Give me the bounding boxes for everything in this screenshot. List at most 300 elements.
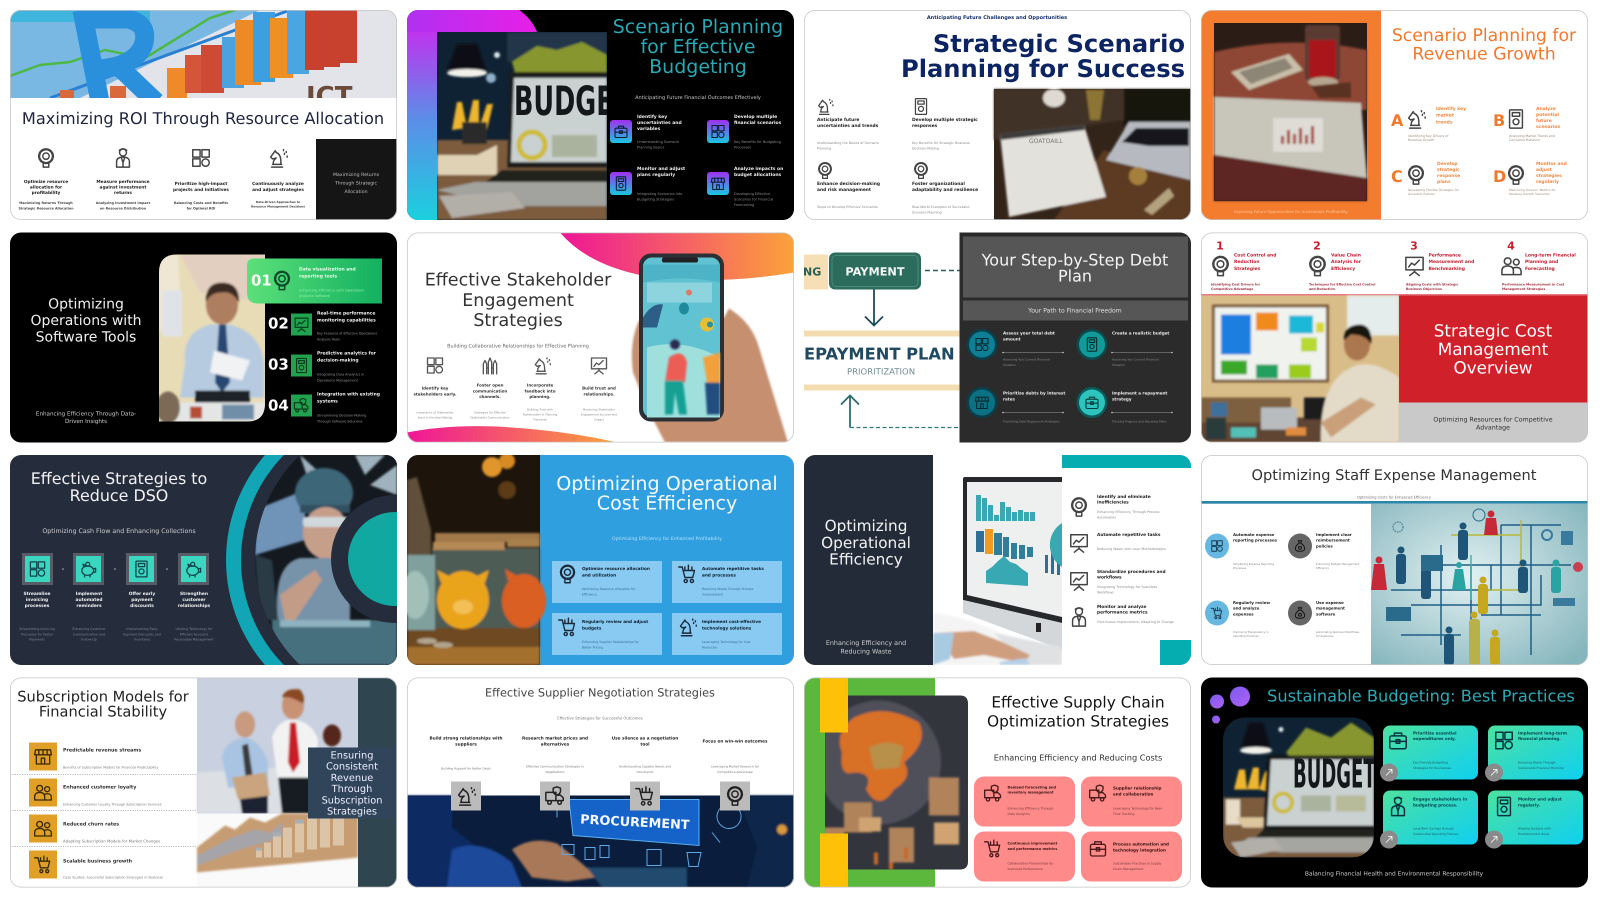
sidebar and overlay box: Ensuring — [331, 750, 373, 762]
item: automate expense reporting — [1205, 532, 1278, 570]
title: Strategic Scenario — [933, 30, 1185, 58]
item: analyze impacts — [707, 166, 783, 207]
item: early payment discounts: Implementing Early — [126, 627, 158, 631]
orange sidebar — [1201, 10, 1381, 220]
item: review expenses: expenses — [1233, 611, 1254, 616]
item: prioritize debts: Prioritizing Debt Repayment Strategies — [1003, 420, 1060, 424]
item: process automation: Chain Management — [1113, 867, 1144, 871]
title: for Effective — [640, 36, 756, 58]
item: reimbursement policies — [1288, 532, 1359, 570]
item: review expenses: Regularly review — [1233, 600, 1270, 605]
item: develop multiple scenarios: Processes — [734, 145, 751, 149]
sidebar: Maximizing Returns — [316, 139, 397, 220]
item: analyze impacts: Forecasting — [734, 203, 754, 207]
photo: ROI 3D bar chart: JCT — [304, 82, 353, 112]
item: build relationships: suppliers — [455, 742, 477, 746]
item: review expenses — [1205, 600, 1270, 638]
item: standardize procedures — [1071, 569, 1166, 594]
item: demand forecasting — [974, 776, 1075, 826]
item: anticipate future: uncertainties and trends — [817, 123, 879, 129]
item: develop strategic responses: Develop multiple strategic — [912, 117, 978, 123]
item: identify stakeholders: stakeholders early. — [413, 391, 457, 396]
item: churn rates — [29, 814, 160, 844]
item: assess total debt — [966, 329, 1064, 367]
item: prioritize debts: Prioritize debts by interest — [1003, 390, 1065, 396]
item: identify key uncertainties — [610, 114, 682, 149]
item: anticipate future — [817, 99, 879, 150]
item: monitor and adjust plans: Monitor and adjust — [637, 166, 686, 172]
item 02: real-time monitoring: Analysis Tools — [317, 338, 340, 342]
item: early payment discounts: Incentives — [134, 638, 151, 642]
item: foster communication: Foster open — [477, 382, 504, 388]
item D: monitor and adjust: Monitor and — [1536, 161, 1567, 167]
item: incorporate feedback: Building Trust with — [527, 408, 553, 412]
item: automate expense reporting: Automate expense — [1233, 532, 1275, 537]
item: streamline invoicing: Payments — [29, 638, 45, 642]
item C: develop response plans: Uncertain Futures — [1408, 192, 1435, 196]
item: engage stakeholders — [1380, 790, 1478, 848]
gradient accent — [407, 10, 537, 220]
item: customer relationships — [174, 553, 214, 642]
teal top accent — [1062, 455, 1191, 468]
item: supplier relationship: Time Tracking — [1112, 812, 1134, 816]
item 4: long-term planning: Planning and — [1525, 259, 1558, 265]
sidebar and overlay box: Strategies — [327, 806, 377, 818]
title: Engagement — [462, 291, 574, 311]
item 3: performance measurement: Performance — [1428, 252, 1461, 258]
photo: two businessmen — [197, 678, 358, 814]
item: prioritize high-impact projects: Prioritize high-impact — [175, 181, 227, 187]
item: assess total debt: Assessing Your Current Financial — [1003, 358, 1050, 362]
sidebar: Maximizing Returns: Allocation — [344, 189, 368, 195]
sidebar: Maximizing Returns: Through Strategic — [334, 181, 377, 187]
item: early payment discounts: discounts — [130, 603, 154, 609]
item: continuously analyze: Resource Management Decisions — [251, 204, 305, 208]
panel: Optimizing Operational Cost Efficiency slide — [401, 453, 794, 665]
item 04: integration: systems — [317, 398, 338, 404]
item 02: real-time monitoring: 02 — [268, 314, 289, 332]
photo: budget laptop — [437, 32, 607, 220]
subtitle: Anticipating Future Financial Outcomes Effectively — [635, 95, 761, 101]
item: foster adaptability: Real-World Examples of Successful — [912, 205, 969, 209]
grey subtitle panel: Advantage — [1476, 424, 1510, 432]
item B: analyze potential scenarios: future — [1536, 118, 1552, 124]
item: foster adaptability: Foster organizational — [912, 181, 965, 187]
sidebar and overlay box: Revenue — [331, 773, 373, 784]
item 01: data visualization — [247, 258, 382, 304]
item: analyze impacts: Scenarios for Financial — [734, 197, 773, 201]
item: resource allocation: Optimizing Resource Allocation for — [582, 587, 636, 591]
item: continuous improvement — [974, 832, 1075, 882]
item D: monitor and adjust — [1493, 161, 1567, 196]
item: supplier relationship: Leveraging Technology for Real- — [1113, 806, 1163, 810]
item: continuously analyze: Data-Driven Approaches to — [256, 200, 300, 204]
photo: iMac with charts — [933, 477, 1062, 665]
title: Plan — [1058, 266, 1092, 286]
item 2: value chain: and Reduction — [1309, 287, 1336, 291]
item: foster communication: Stakeholder Communication — [470, 416, 510, 420]
item: streamline invoicing: Streamline — [23, 591, 51, 597]
item A: identify market trends: Identifying Key Drivers of — [1408, 134, 1449, 138]
item: use silence: tool — [640, 742, 650, 746]
item: prioritize high-impact projects: projects and initiatives — [173, 187, 229, 193]
item: monitor regularly: regularly. — [1518, 802, 1541, 808]
item: prioritize expenditures: Prioritize essential — [1413, 730, 1457, 736]
photo: piggy banks in jars — [401, 453, 546, 665]
item: identify stakeholders — [413, 358, 457, 420]
item: build relationships: Building Rapport for Better Deals — [441, 766, 491, 770]
item: scalable growth: Scalable business growth — [63, 858, 133, 864]
item: review budgets: budgets — [582, 625, 602, 630]
dark title sidebar: Efficiency — [829, 551, 903, 569]
item B: analyze potential scenarios: Consumer Behavior — [1509, 138, 1541, 142]
item: analyze impacts: Analyze impacts on — [734, 166, 783, 172]
title: Sustainable Budgeting: Best Practices — [1267, 686, 1575, 706]
item 03: predictive analytics: Predictive analytics for — [317, 350, 377, 356]
item 3: performance measurement — [1406, 240, 1474, 291]
item: resource allocation: Efficiency — [582, 593, 597, 597]
photo: budget laptop — [1223, 718, 1376, 858]
caption: Balancing Financial Health and Environmental Responsibility — [1305, 870, 1484, 878]
item: monitor regularly: Environmental Goals — [1518, 832, 1550, 836]
item: automate tasks: Improvement — [702, 593, 724, 597]
item: standardize procedures: Workflows — [1097, 590, 1114, 594]
item: implement repayment: Tracking Progress and Adjusting Plans — [1111, 420, 1167, 424]
item B: analyze potential scenarios: Analyzing Market Trends and — [1509, 134, 1555, 138]
title: Reduce DSO — [70, 486, 168, 505]
item: prioritize high-impact projects: for Optimal ROI — [187, 207, 215, 211]
item: identify stakeholders: Identify key — [422, 386, 449, 390]
item: reimbursement policies: policies — [1316, 543, 1333, 548]
item: win-win outcomes: Focus on win-win outcomes — [703, 738, 768, 744]
item A: identify market trends: Identify key — [1436, 106, 1466, 112]
item: customer loyalty: Enhanced customer loyalty — [63, 784, 137, 790]
title: Financial Stability — [39, 704, 167, 721]
item C: develop response plans: Developing Flexible Strategies for — [1408, 188, 1460, 192]
item: prioritize expenditures: Strategies for Businesses — [1413, 766, 1451, 770]
item: identify key uncertainties: Understanding Scenario — [637, 140, 679, 144]
item: develop strategic responses: Decision-Making — [912, 146, 939, 150]
item: monitor regularly: Aligning Budgets with — [1518, 826, 1551, 830]
item: churn rates: Reduced churn rates — [63, 822, 119, 828]
item 4: long-term planning: Performance Measurement in Cost — [1502, 282, 1565, 286]
item: win-win outcomes: Competitive Advantage — [717, 770, 753, 774]
item: analyze impacts: Developing Effective — [734, 192, 770, 196]
item: create budget: Assessing Your Current Financial — [1112, 358, 1159, 362]
item: incorporate feedback — [523, 358, 558, 422]
item 4: long-term planning: Management Strategies — [1502, 287, 1545, 291]
item C: develop response plans: strategic — [1437, 167, 1460, 173]
item: long-term planning: Implement long-term — [1518, 730, 1567, 736]
subtitle: Building Collaborative Relationships for Effective Planning — [447, 344, 589, 350]
item: research market: Negotiations — [546, 770, 565, 774]
subtitle: Your Path to Financial Freedom — [1027, 308, 1122, 314]
item 03: predictive analytics: Operations Management — [317, 378, 359, 382]
photo: orange globe logistics — [817, 696, 968, 870]
title: Subscription Models for — [17, 688, 189, 706]
item: reimbursement policies: Implement clear — [1316, 532, 1352, 537]
photo: manager with papers — [156, 254, 265, 424]
title: Your Step-by-Step Debt — [981, 250, 1168, 270]
title: Software Tools — [36, 330, 136, 346]
item: streamline invoicing: Streamlining Invoicing — [19, 627, 55, 631]
item 04: integration: Streamlining Decision-Making — [317, 414, 366, 418]
item 1: cost control: 1 — [1216, 240, 1224, 252]
item: foster adaptability: adaptability and resilience — [912, 187, 978, 193]
subtitle: Driven Insights — [65, 418, 107, 425]
teal corner accent — [1160, 640, 1191, 665]
item: early payment discounts — [123, 553, 161, 642]
item: customer loyalty — [29, 778, 162, 806]
item: scalable growth: Case Studies: Successful Subscription Strategies in Business — [63, 876, 163, 880]
item: enhance decision-making: and risk management — [817, 187, 871, 193]
item: monitor regularly: Monitor and adjust — [1518, 796, 1562, 802]
top gradient blob — [560, 232, 794, 280]
item: foster communication — [470, 358, 510, 420]
item 02: real-time monitoring — [268, 310, 377, 342]
item: automated reminders: Enhancing Customer — [72, 627, 106, 631]
item: monitor metrics: Monitor and analyze — [1097, 604, 1147, 610]
item: long-term planning: financial planning. — [1518, 736, 1561, 741]
photo: desk with notebook — [994, 89, 1191, 220]
item 01: data visualization: Analysis Software — [299, 294, 330, 298]
item: monitor and adjust plans: plans regularly — [637, 172, 675, 178]
item 03: predictive analytics — [268, 350, 377, 382]
item: use silence: Constraints — [636, 770, 654, 774]
item 01: data visualization: reporting tools — [299, 274, 337, 280]
title: Effective Supplier Negotiation Strategies — [485, 686, 715, 700]
item: reimbursement policies: Enhancing Budget Management — [1316, 562, 1359, 566]
item 02: real-time monitoring: Key Features of Effective Operations — [317, 332, 377, 336]
item: automated reminders: reminders — [76, 603, 102, 609]
title: Scenario Planning for — [1392, 26, 1577, 46]
panel: Subscription Models slide — [10, 678, 397, 888]
item: demand forecasting: Enhancing Efficiency Through — [1008, 806, 1053, 810]
illustration: repayment plan diagram: NG — [803, 266, 821, 278]
item D: monitor and adjust: adjust — [1536, 167, 1553, 173]
item: automated reminders: Communication and — [73, 632, 105, 636]
item B: analyze potential scenarios: scenarios — [1536, 124, 1560, 130]
subtitle: Optimizing Cash Flow and Enhancing Collections — [42, 528, 196, 535]
item A: identify market trends: A — [1391, 111, 1404, 130]
item: continuous improvement: and performance metrics — [1008, 847, 1057, 851]
item: identify key uncertainties: Planning Basics — [637, 145, 664, 149]
panel: Scenario Planning for Revenue Growth slide — [1201, 10, 1588, 220]
item 1: cost control: Identifying Cost Drivers for — [1211, 282, 1260, 286]
title: Optimizing — [48, 296, 124, 312]
item: prioritize expenditures — [1380, 726, 1478, 782]
item: customer relationships: customer — [182, 597, 206, 603]
title: Planning for Success — [901, 55, 1185, 83]
panel: Effective Strategies to Reduce DSO slide — [10, 399, 548, 721]
item: monitor and adjust plans: Budgeting Strategies — [637, 197, 674, 201]
item: create budget: Situation — [1112, 363, 1125, 367]
item: measure performance — [96, 149, 151, 211]
item: churn rates: Adapting Subscription Models for Market Changes — [63, 838, 160, 844]
item: expense software: Automating Approval Workflows — [1316, 630, 1360, 634]
bottom gradient blob — [407, 426, 617, 442]
item: long-term planning: Sustainable Financial Planning — [1518, 766, 1564, 770]
item D: monitor and adjust: Revenue Growth Scenarios — [1509, 192, 1550, 196]
item: supplier relationship: and collaboration — [1113, 792, 1154, 797]
item: expense software — [1288, 600, 1360, 638]
dark title sidebar: Optimizing — [825, 517, 907, 535]
item: monitor and adjust plans — [610, 166, 686, 201]
item: demand forecasting: Demand forecasting and — [1008, 786, 1056, 790]
illustration: repayment plan diagram: EPAYMENT PLAN — [804, 344, 955, 364]
dark plan panel — [960, 232, 1192, 442]
dark title sidebar: Enhancing Efficiency and — [826, 639, 906, 647]
item: research market — [522, 736, 588, 810]
item: optimize resource allocation: allocation for — [30, 185, 63, 191]
item: identify key uncertainties: variables — [637, 126, 661, 132]
subtitle: Optimizing Efficiency for Enhanced Profitability — [612, 536, 722, 542]
panel: Sustainable Budgeting slide — [1201, 678, 1588, 888]
item: process automation: Sustainable Practices in Supply — [1113, 862, 1162, 866]
dark title sidebar: Operational — [821, 534, 911, 552]
item: identify inefficiencies — [1072, 494, 1160, 519]
item: enhance decision-making: Enhance decision-making — [817, 181, 880, 187]
item: foster communication: communication — [473, 388, 507, 393]
item: engage stakeholders: Long-Term Savings through — [1413, 826, 1454, 830]
item: customer relationships: Utilizing Technology for — [175, 627, 213, 631]
item: engage stakeholders: Sustainable Spending Choices — [1413, 832, 1459, 836]
item: build trust: Measuring Stakeholder — [583, 408, 616, 412]
item: prioritize expenditures: Eco-Friendly Budgeting — [1413, 760, 1448, 764]
item 3: performance measurement: Business Objectives — [1406, 287, 1442, 291]
photo: people network diagram — [1371, 504, 1588, 666]
red title panel: Management — [1438, 339, 1549, 359]
item D: monitor and adjust: regularly — [1536, 179, 1559, 185]
item: develop multiple scenarios — [707, 114, 782, 149]
item: build relationships — [430, 736, 503, 810]
item: automate tasks: Reducing Waste Through Process — [702, 587, 754, 591]
item C: develop response plans — [1391, 161, 1460, 196]
item: incorporate feedback: planning. — [529, 394, 551, 399]
item: assess total debt: amount — [1003, 336, 1021, 341]
decorative purple circles — [1210, 686, 1250, 724]
item 1: cost control: Strategies — [1234, 266, 1261, 272]
photo: ROI 3D bar chart — [10, 10, 396, 98]
item: automate tasks: and processes — [702, 572, 736, 577]
item 1: cost control: Reduction — [1234, 259, 1260, 265]
item: demand forecasting: inventory management — [1008, 790, 1054, 794]
item: measure performance: Measure performance — [96, 179, 150, 185]
item 2: value chain — [1309, 240, 1375, 291]
item: identify stakeholders: Input in Decision-Making — [418, 416, 453, 420]
item: anticipate future: Planning — [817, 146, 831, 150]
title: Optimizing Operational — [556, 472, 778, 495]
title: Revenue Growth — [1412, 44, 1556, 64]
panel: Optimizing Operational Efficiency slide — [804, 455, 1191, 665]
item: identify inefficiencies: Identify and eliminate — [1097, 494, 1151, 500]
item 03: predictive analytics: Integrating Data Analytics in — [317, 372, 364, 376]
item: review budgets: Enhancing Supplier Relationships for — [582, 640, 639, 644]
item: research market: alternatives — [541, 742, 570, 746]
item: develop multiple scenarios: financial scenarios — [734, 120, 782, 126]
item: customer relationships: relationships — [178, 603, 211, 609]
item 4: long-term planning — [1502, 240, 1576, 291]
item: predictable revenue: Predictable revenue streams — [63, 748, 141, 754]
item: research market: Effective Communication Strategies in — [526, 764, 584, 768]
item: develop strategic responses: responses — [912, 124, 938, 129]
item: enhance decision-making — [817, 163, 880, 209]
item: optimize resource allocation — [18, 149, 74, 211]
item: identify inefficiencies: Automation — [1097, 515, 1116, 519]
panel: Your Step-by-Step Debt Plan slide — [803, 232, 1192, 442]
item: identify stakeholders: Importance of Stakeholder — [416, 410, 454, 414]
item A: identify market trends — [1391, 106, 1466, 142]
subtitle: Optimizing Costs for Enhanced Efficiency — [1357, 496, 1432, 500]
item: incorporate feedback: Processes — [533, 418, 547, 422]
title: Budgeting — [649, 56, 747, 78]
item: automate expense reporting: Simplifying Expense Reporting — [1233, 562, 1274, 566]
red title panel — [1399, 296, 1588, 402]
item: win-win outcomes: Leveraging Market Research for — [711, 764, 760, 768]
item: cost-effective technology: Leveraging Technology for Cost — [702, 640, 751, 644]
item: engage stakeholders: Engage stakeholders in — [1413, 796, 1467, 802]
item: predictable revenue — [29, 742, 159, 770]
item 01: data visualization: 01 — [251, 272, 272, 290]
item: customer loyalty: Enhancing Customer Loyalty Through Subscription Services — [63, 802, 162, 806]
item: expense software: management — [1316, 606, 1345, 611]
title: Optimizing Staff Expense Management — [1252, 467, 1537, 484]
item: predictable revenue: Benefits of Subscription Models for Financial Predictability — [63, 766, 159, 770]
item: cost-effective technology — [672, 613, 782, 655]
title: Cost Efficiency — [597, 491, 737, 514]
item: continuously analyze: and adjust strategies — [252, 187, 304, 193]
dark title sidebar: Reducing Waste — [840, 647, 892, 655]
item D: monitor and adjust: D — [1493, 167, 1506, 186]
item: automated reminders: automated — [76, 597, 102, 603]
item: develop multiple scenarios: Key Benefits for Budgeting — [734, 140, 781, 144]
item: develop multiple scenarios: Develop multiple — [734, 114, 777, 120]
item: continuous improvement: Improved Performance — [1008, 867, 1043, 871]
item: process automation: Process automation and — [1113, 842, 1169, 846]
item: automated reminders: Implement — [76, 591, 102, 597]
item: streamline invoicing: Processes for Faster — [21, 632, 54, 636]
item: monitor and adjust plans: Integrating Scenarios into — [637, 192, 682, 196]
item: continuous improvement: Continuous improvement — [1008, 842, 1058, 846]
item: expense software: software — [1316, 611, 1336, 616]
item: anticipate future: Anticipate future — [817, 117, 859, 123]
eyebrow text: Anticipating Future Challenges and Opportunities — [927, 15, 1067, 21]
item: supplier relationship: Supplier relationship — [1113, 786, 1162, 790]
item: demand forecasting: Data Analytics — [1008, 812, 1030, 816]
item A: identify market trends: Revenue Growth — [1408, 138, 1434, 142]
item: reimbursement policies: Efficiency — [1316, 566, 1329, 570]
item: implement repayment: Implement a repayment — [1112, 390, 1167, 396]
panel: Effective Supply Chain Optimization slide — [804, 678, 1191, 888]
item: customer relationships: Receivable Management — [174, 638, 214, 642]
panel: Maximizing ROI slide — [10, 10, 397, 220]
subtitle: Enhancing Efficiency Through Data- — [36, 410, 136, 418]
item: build trust: Impact — [594, 418, 605, 422]
item: monitor regularly — [1485, 790, 1583, 848]
title: Operations with — [30, 313, 142, 329]
item: develop strategic responses — [912, 99, 978, 150]
item: expense software: for Expenses — [1316, 634, 1334, 638]
item: automated reminders: Follow-Up — [81, 638, 97, 642]
item 3: performance measurement: Aligning Costs with Strategic — [1406, 282, 1458, 286]
item B: analyze potential scenarios: Analyze — [1536, 106, 1556, 112]
item: review budgets: Better Pricing — [582, 646, 603, 650]
item: standardize procedures: workflows — [1097, 575, 1122, 581]
item C: develop response plans: plans — [1437, 179, 1451, 185]
item: process automation: technology integration — [1113, 848, 1166, 853]
item: streamline invoicing — [19, 553, 55, 642]
panel: Optimizing Staff Expense Management slide — [1201, 455, 1588, 666]
